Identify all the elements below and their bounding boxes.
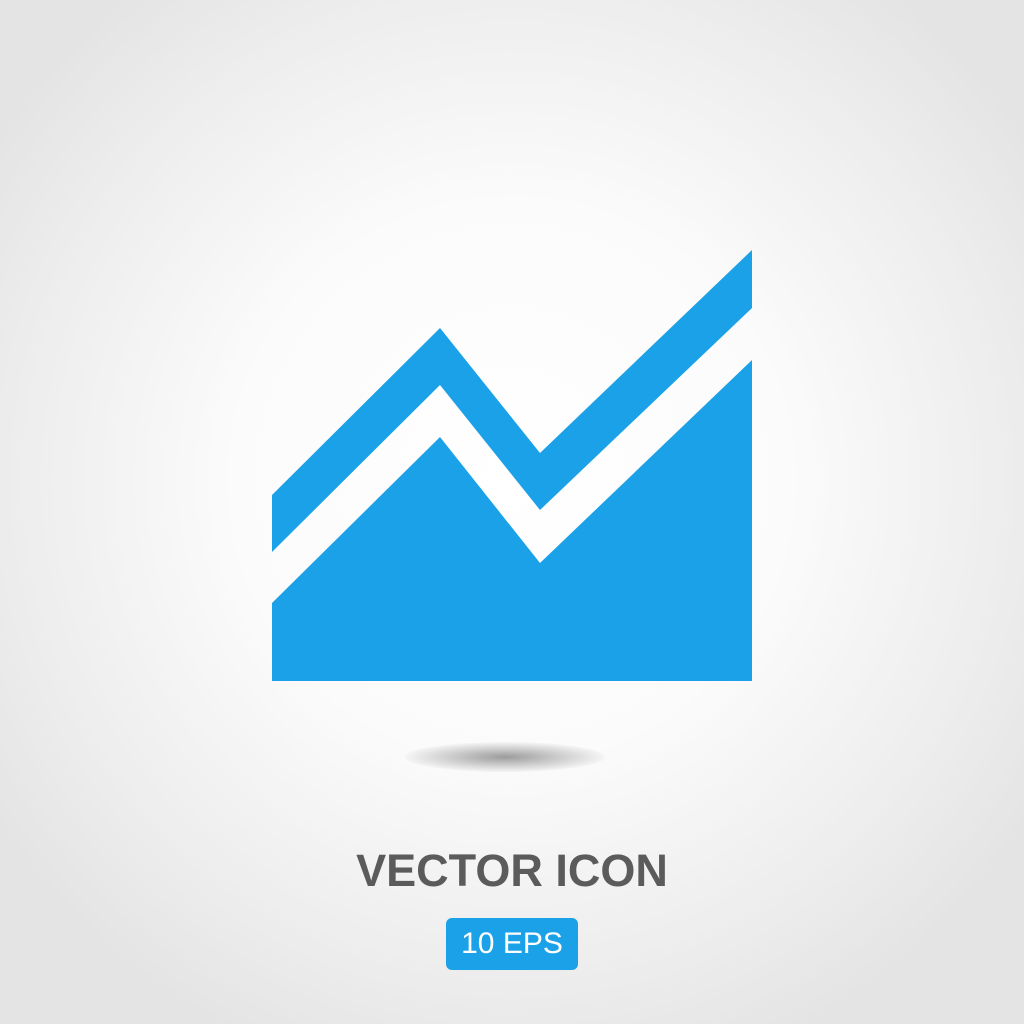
- badge: 10 EPS: [446, 918, 578, 970]
- shadow under icon: [405, 742, 605, 772]
- chart band (top line): [272, 250, 752, 552]
- chart area: [272, 360, 752, 681]
- badge: 10 EPS: 10 EPS: [461, 927, 563, 960]
- title: vector icon: VECTOR ICON: [356, 845, 668, 896]
